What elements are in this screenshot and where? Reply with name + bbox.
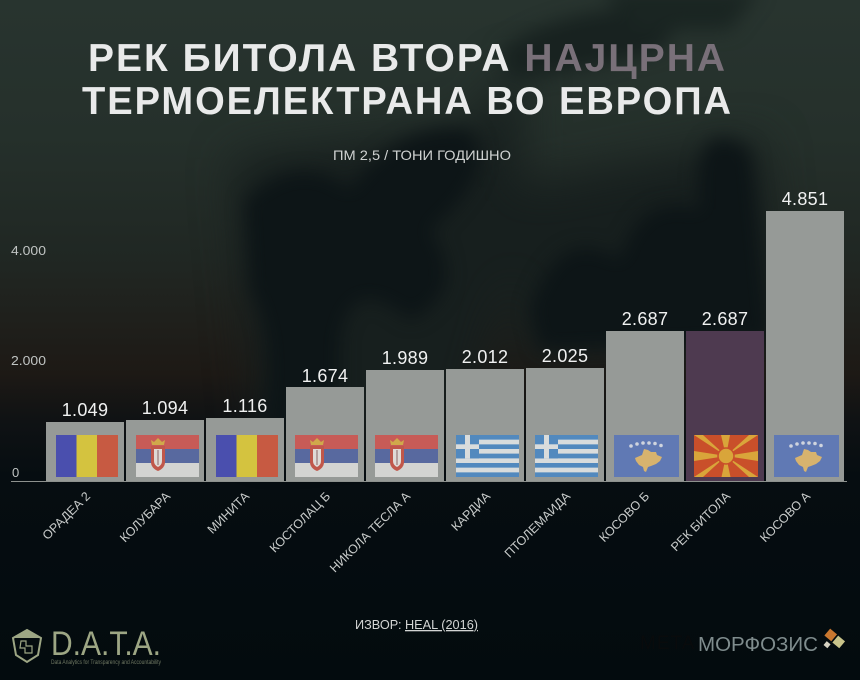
bar: Минита: 1.116 — [222, 396, 268, 416]
logo: D.A.T.A. — [12, 625, 161, 666]
icon: squares — [824, 629, 845, 648]
icon: shield — [12, 629, 42, 662]
category labels: КОСОВО А — [757, 489, 814, 545]
category labels: КОЛУБАРА — [117, 489, 174, 545]
logo: Метаморфозис: МОРФОЗИС — [698, 634, 818, 656]
bar: РЕК Битола (highlighted): 2.687 — [702, 309, 748, 329]
bar: Костолац Б: 1.674 — [302, 366, 348, 386]
bar: Колубара — [126, 398, 204, 481]
logo: D.A.T.A.: D.A.T.A. — [51, 625, 161, 663]
bar: Кардиа: 2.012 — [462, 347, 508, 367]
y axis labels — [11, 243, 46, 480]
category labels: КАРДИА — [449, 489, 494, 534]
bar: Никола Тесла А: 1.989 — [382, 348, 428, 368]
bar: Косово Б: 2.687 — [622, 309, 668, 329]
axis baseline — [11, 481, 847, 482]
category labels — [40, 489, 814, 575]
bar: Колубара: 1.094 — [142, 398, 188, 418]
bar: Косово Б — [606, 309, 684, 481]
smoke haze — [235, 60, 780, 440]
logo: Метаморфозис: META — [640, 633, 695, 654]
bar: Никола Тесла А — [366, 348, 444, 481]
subtitle: ПМ 2,5 / ТОНИ ГОДИШНО — [333, 147, 511, 163]
category labels: ПТОЛЕМАИДА — [502, 489, 574, 560]
title — [82, 37, 733, 123]
bar: РЕК Битола (highlighted) — [686, 309, 764, 481]
category labels: НИКОЛА ТЕСЛА А — [327, 489, 414, 575]
category labels: КОСОВО Б — [596, 489, 652, 545]
y axis labels: 2.000 — [11, 353, 46, 368]
title: ТЕРМОЕЛЕКТРАНА ВО ЕВРОПА — [82, 80, 733, 123]
category labels: МИНИТА — [205, 489, 253, 537]
category labels: ОРАДЕА 2 — [40, 489, 93, 543]
bar: Кардиа — [446, 347, 524, 481]
category labels: КОСТОЛАЦ Б — [267, 489, 333, 555]
bar: Орадеа 2 — [46, 400, 124, 481]
logo: Метаморфозис — [640, 629, 845, 656]
logo: D.A.T.A.: Data Analytics for Transparency and Accountability — [51, 660, 161, 666]
dark smoke columns — [245, 0, 770, 440]
bar: Орадеа 2: 1.049 — [62, 400, 108, 420]
bar: Костолац Б — [286, 366, 364, 481]
y axis labels: 0 — [12, 465, 19, 480]
title: РЕК БИТОЛА ВТОРА НАЈЦРНА — [88, 37, 727, 80]
bar: Минита — [206, 396, 284, 481]
source line: ИЗВОР: HEAL (2016) — [355, 617, 478, 632]
y axis labels: 4.000 — [11, 243, 46, 258]
category labels: РЕК БИТОЛА — [668, 489, 734, 554]
bar: Птолемаида: 2.025 — [542, 346, 588, 366]
bar: Птолемаида — [526, 346, 604, 481]
bar chart — [11, 189, 847, 482]
bar: Косово А: 4.851 — [782, 189, 828, 209]
bar: Косово А — [766, 189, 844, 481]
